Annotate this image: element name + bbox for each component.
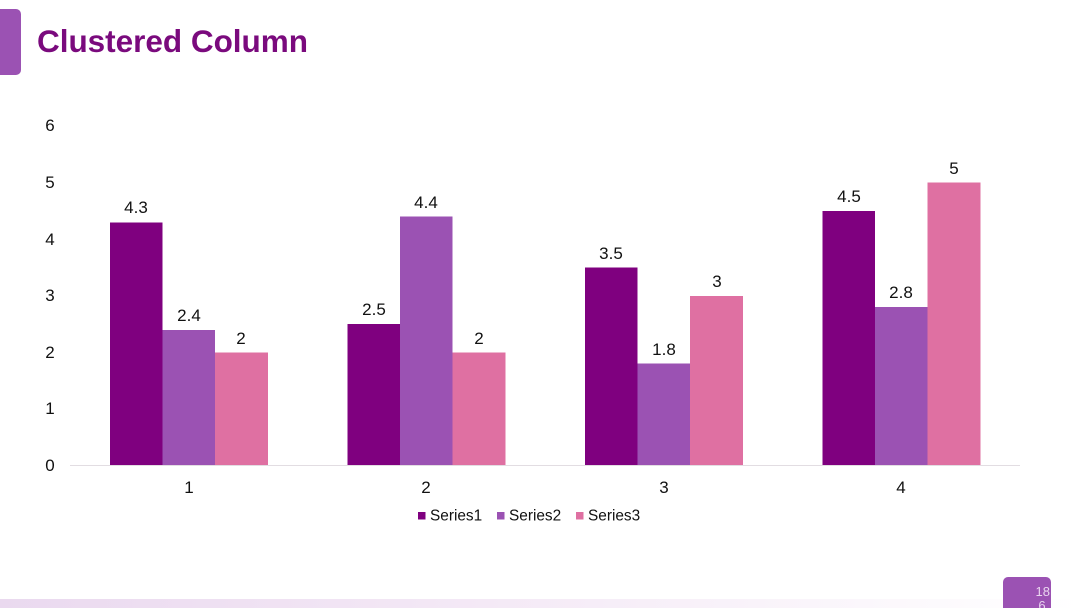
y axis labels: 5 <box>45 173 55 192</box>
y axis labels: 3 <box>45 286 55 305</box>
y axis labels: 1 <box>45 399 55 418</box>
page number badge: 18 <box>1036 584 1050 599</box>
footer gradient band <box>0 599 1080 608</box>
series1 bars <box>110 211 875 465</box>
x axis labels: 2 <box>421 478 431 497</box>
title accent tab <box>0 9 21 75</box>
y axis labels: 6 <box>45 116 55 135</box>
data labels: 3 <box>712 272 722 291</box>
data labels: 3.5 <box>599 244 623 263</box>
series3 bars <box>215 182 980 465</box>
chart: clustered column <box>45 116 1020 524</box>
data labels: 2.5 <box>362 300 386 319</box>
x axis labels: 3 <box>659 478 669 497</box>
data labels: 4.5 <box>837 187 861 206</box>
data labels <box>124 159 959 359</box>
legend: Series2 <box>509 508 561 524</box>
y axis labels: 4 <box>45 230 55 249</box>
data labels: 1.8 <box>652 340 676 359</box>
data labels: 2 <box>236 329 246 348</box>
series2 bars <box>162 216 928 465</box>
x axis labels: 1 <box>184 478 194 497</box>
y axis labels: 0 <box>45 456 55 475</box>
data labels: 4.4 <box>414 193 438 212</box>
x axis labels <box>184 478 906 497</box>
legend <box>418 508 640 524</box>
y axis labels <box>45 116 55 475</box>
legend: Series3 <box>588 508 640 524</box>
data labels: 2 <box>474 329 484 348</box>
data labels: 5 <box>949 159 959 178</box>
page number badge <box>1003 577 1051 608</box>
legend: Series1 <box>430 508 482 524</box>
data labels: 2.8 <box>889 283 913 302</box>
baseline axis <box>70 465 1020 466</box>
data labels: 4.3 <box>124 198 148 217</box>
data labels: 2.4 <box>177 306 201 325</box>
y axis labels: 2 <box>45 343 55 362</box>
x axis labels: 4 <box>896 478 906 497</box>
title: Clustered Column <box>37 23 308 59</box>
